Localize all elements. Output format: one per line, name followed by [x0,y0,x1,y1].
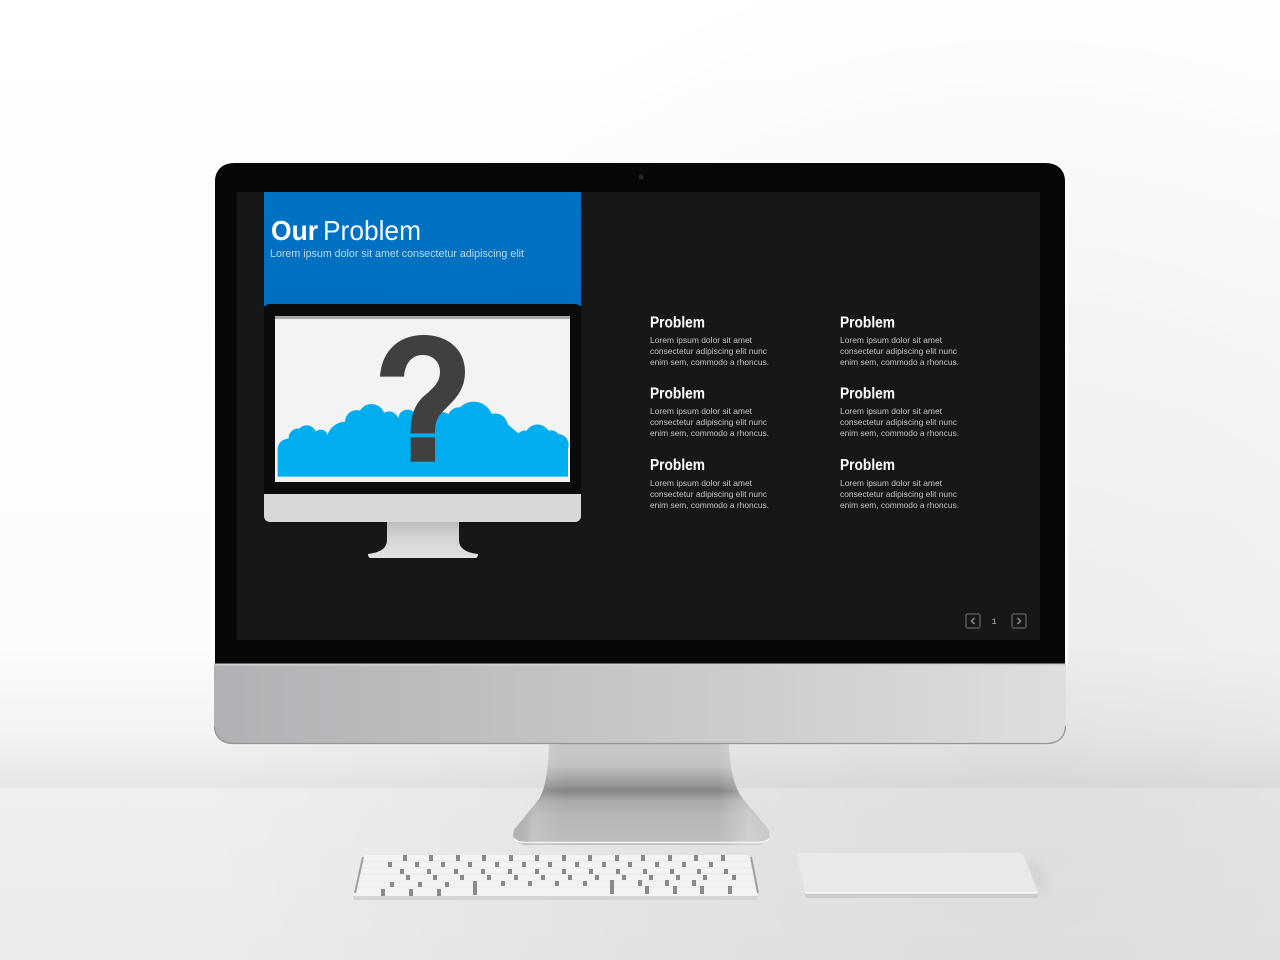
text block: problem 1: Problem [650,314,705,332]
background: desk [0,788,1280,960]
monitor chin [214,665,1066,744]
text block: problem 6: consectetur adipiscing elit nunc [840,489,958,499]
text block: problem 4: enim sem, commodo a rhoncus. [840,428,959,438]
panel: blue title header [264,192,581,306]
monitor stand [513,744,770,845]
desktop monitor [214,162,1066,744]
text block: problem 2: Lorem ipsum dolor sit amet [840,335,943,345]
text block: problem 2 [840,314,959,367]
text block: problem 3 [650,386,769,438]
subtitle: Lorem ipsum dolor sit amet consectetur adipiscing elit [270,248,524,260]
monitor edge highlight [214,162,1066,665]
text block: problem 3: Problem [650,386,705,402]
text block: problem 4: Problem [840,386,895,402]
text block: problem 4: Lorem ipsum dolor sit amet [840,406,943,416]
mini monitor stand [368,522,478,558]
text block: problem 3: consectetur adipiscing elit nunc [650,417,768,427]
text block: problem 1: consectetur adipiscing elit nunc [650,346,768,356]
text block: problem 6: Problem [840,457,895,474]
text block: problem 5: consectetur adipiscing elit nunc [650,489,768,499]
text block: problem 1 [650,314,769,367]
text block: problem 2: enim sem, commodo a rhoncus. [840,357,959,367]
page number: 1 [991,617,997,627]
mini monitor bezel [264,304,581,494]
text block: problem 3: Lorem ipsum dolor sit amet [650,406,753,416]
pagination controls [966,614,1026,628]
text block: problem 6: enim sem, commodo a rhoncus. [840,500,959,510]
text block: problem 5: Lorem ipsum dolor sit amet [650,478,753,488]
text block: problem 1: enim sem, commodo a rhoncus. [650,357,769,367]
clouds [278,402,569,477]
illustration: monitor with question mark [264,304,581,558]
title: Problem [323,215,421,246]
keyboard [353,855,758,900]
mini monitor chin [264,494,581,522]
mini monitor screen [275,316,570,482]
text block: problem 5: Problem [650,457,705,474]
text block: problem 2: Problem [840,314,895,332]
icon: previous arrow [966,614,980,628]
title [271,215,421,246]
icon: next arrow [1012,614,1026,628]
text block: problem 2: consectetur adipiscing elit nunc [840,346,958,356]
text block: problem 1: Lorem ipsum dolor sit amet [650,335,753,345]
text block: problem 3: enim sem, commodo a rhoncus. [650,428,769,438]
slide screen [237,192,1040,640]
monitor bezel [215,163,1065,665]
text block: problem 6: Lorem ipsum dolor sit amet [840,478,943,488]
trackpad [797,853,1050,898]
icon: question mark [380,335,465,462]
title: Our [271,215,318,246]
text block: problem 6 [840,457,959,510]
text block: problem 4 [840,386,959,438]
webcam [638,174,644,180]
text block: problem 5 [650,457,769,510]
text block: problem 4: consectetur adipiscing elit nunc [840,417,958,427]
trackpad shadow [1024,860,1050,893]
text block: problem 5: enim sem, commodo a rhoncus. [650,500,769,510]
